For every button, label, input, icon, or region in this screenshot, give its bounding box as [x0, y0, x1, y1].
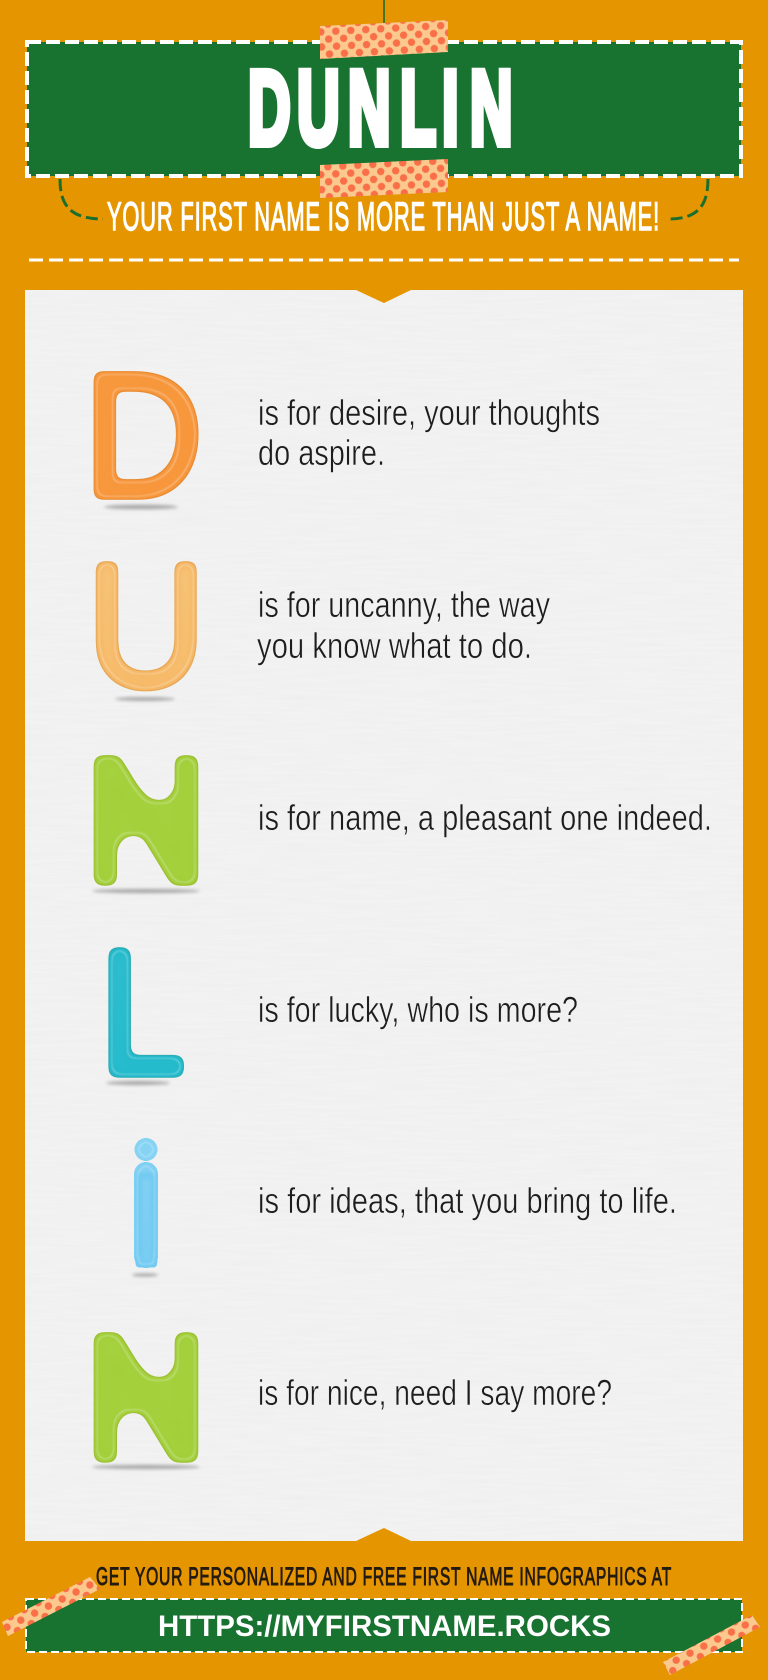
shadow L [106, 1081, 170, 1085]
shadow N second [92, 1465, 200, 1469]
right connector [669, 179, 708, 219]
text i: is for ideas, that you bring to life. [258, 1180, 677, 1221]
row N [84, 722, 712, 919]
panel: letters [25, 290, 743, 1541]
shadow i [132, 1273, 158, 1277]
top tape [320, 20, 448, 59]
row i [128, 1115, 677, 1300]
text U: you know what to do. [257, 625, 532, 666]
text D: do aspire. [258, 432, 385, 473]
letter U: U [87, 527, 206, 724]
top notch [356, 290, 411, 303]
row U [87, 527, 550, 724]
left tape [2, 1577, 100, 1636]
row N second [84, 1299, 612, 1496]
text D [258, 392, 600, 473]
text L: is for lucky, who is more? [258, 989, 578, 1030]
shadow N [92, 889, 200, 893]
left connector [60, 179, 103, 219]
hanging line [383, 0, 385, 26]
text U: is for uncanny, the way [258, 584, 550, 625]
text D: is for desire, your thoughts [258, 392, 600, 433]
subtitle group [60, 179, 708, 239]
title banner [27, 20, 741, 198]
letter L: L [100, 915, 185, 1111]
right tape [663, 1615, 760, 1675]
letter i: i [128, 1115, 165, 1300]
text U [257, 584, 550, 666]
bottom tape [320, 159, 448, 198]
bottom notch [356, 1528, 411, 1541]
letter N second: N [84, 1299, 208, 1496]
letter D: D [84, 337, 203, 534]
letter N: N [84, 722, 208, 919]
letter i [134, 1138, 158, 1268]
title: DUNLIN [248, 50, 512, 167]
shadow D [104, 505, 178, 509]
footer banner [2, 1577, 760, 1675]
text N second: is for nice, need I say more? [258, 1372, 612, 1413]
url: HTTPS://MYFIRSTNAME.ROCKS [158, 1610, 611, 1643]
row D [84, 337, 600, 534]
row L [100, 915, 578, 1111]
shadow U [115, 697, 175, 701]
